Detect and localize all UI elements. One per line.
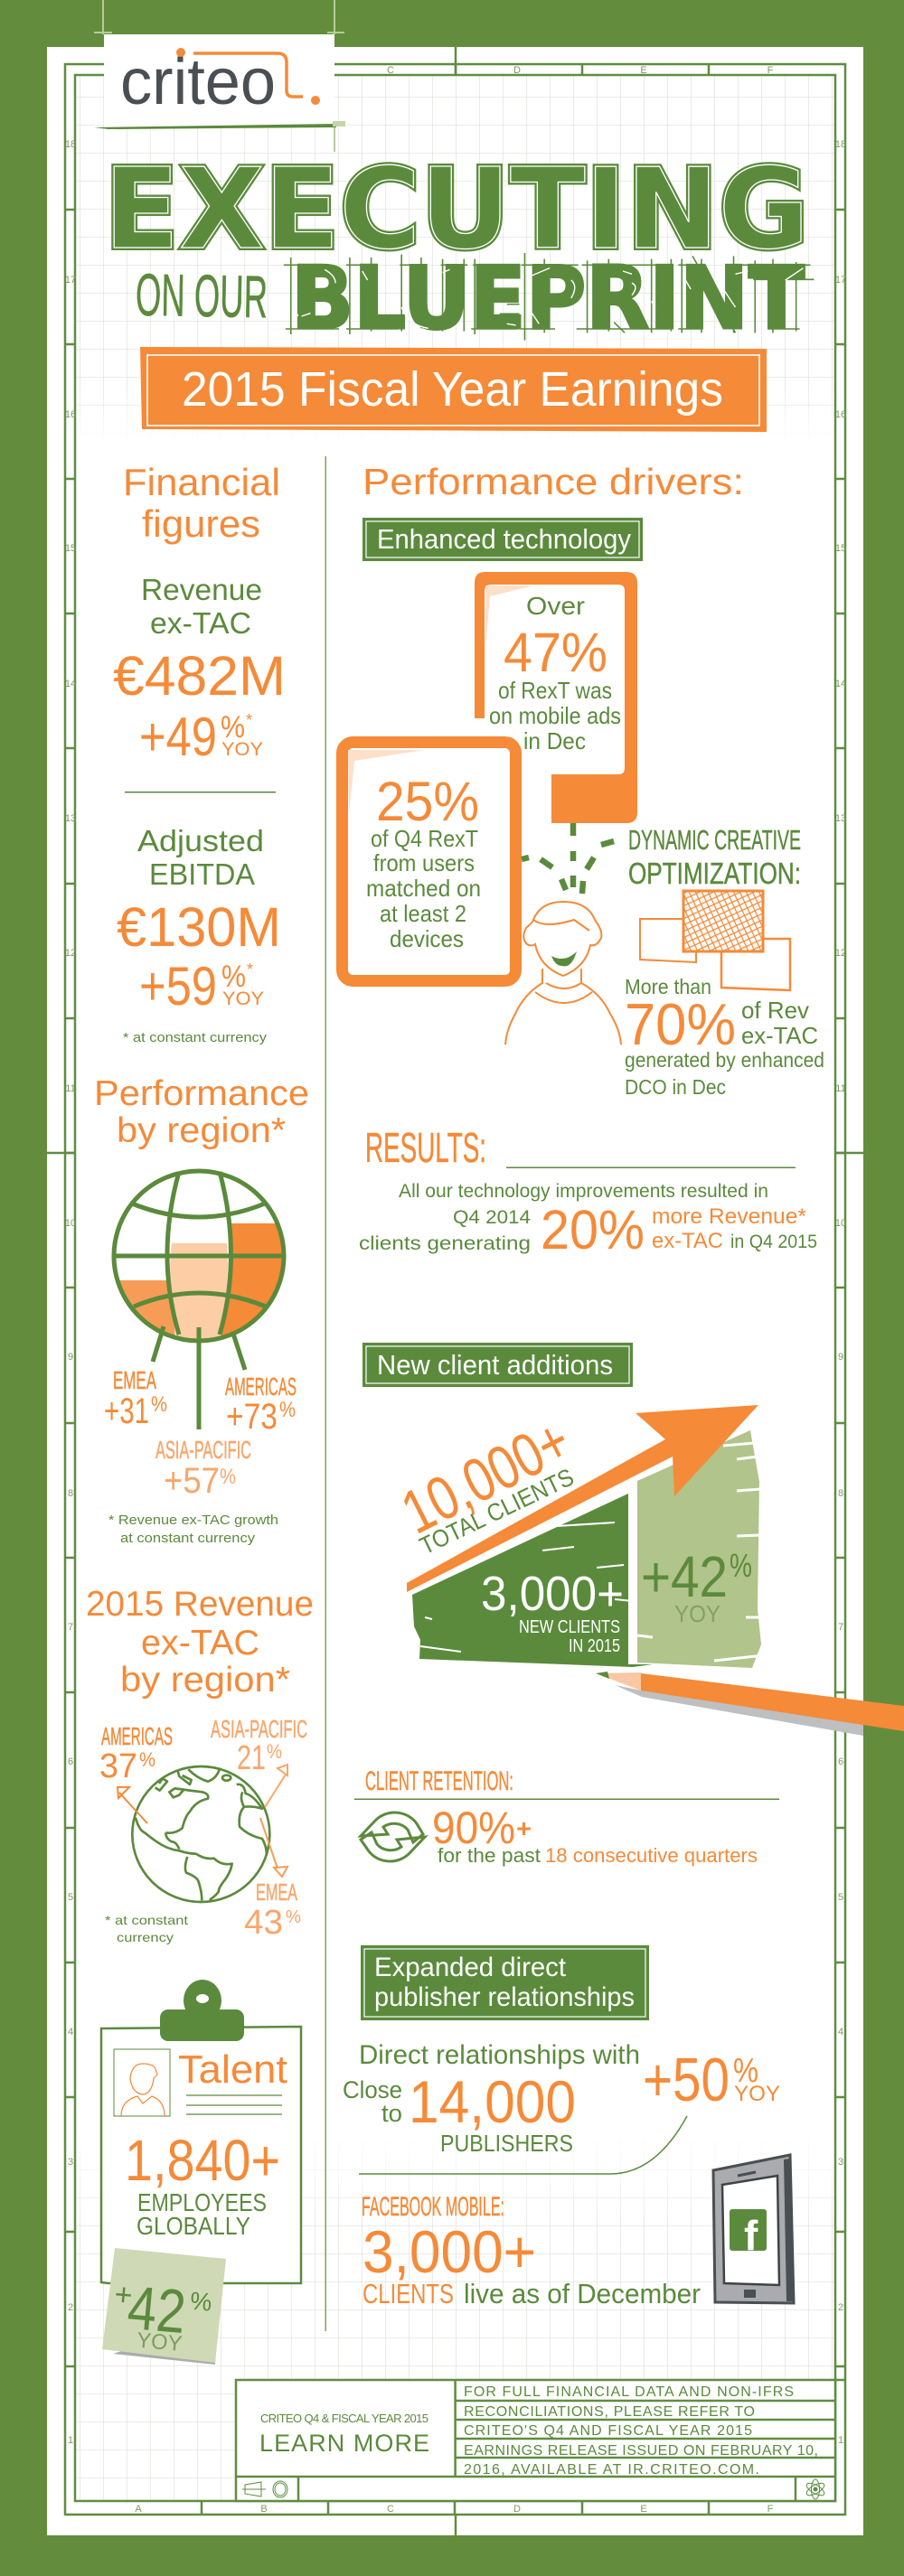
label box: enhanced technology: Enhanced technology	[377, 523, 631, 555]
label: Asia-Pacific: %	[220, 1465, 236, 1489]
footnote: * at constant currency	[123, 1030, 268, 1045]
blueprint grid	[75, 75, 835, 2501]
icon: creative rectangles	[640, 891, 790, 990]
heading: financial figures	[123, 461, 280, 545]
frame reference labels: 6	[68, 1756, 73, 1767]
label: Americas share: %	[139, 1748, 155, 1771]
title: on our: ON OUR	[135, 261, 268, 330]
frame reference labels: 4	[838, 2027, 843, 2037]
heading: 2015 Revenue	[86, 1585, 314, 1624]
callout: 47% mobile: of RexT was	[498, 677, 612, 704]
footnote: at constant currency	[120, 1531, 256, 1546]
frame reference labels: 13	[65, 813, 76, 824]
metric: adjusted EBITDA: +59	[139, 956, 217, 1016]
text: direct relationships: Direct relationships with	[359, 2040, 640, 2070]
sticky note: +42% YOY: YOY	[136, 2328, 183, 2356]
text: consecutive quarters	[438, 1844, 758, 1867]
frame reference labels: 9	[68, 1352, 73, 1363]
label: Asia-Pacific: +57	[164, 1461, 220, 1501]
text: learn more: LEARN MORE	[259, 2430, 429, 2457]
metric: employees: 1,840+	[125, 2128, 280, 2193]
metric: 70% DCO: DCO in Dec	[625, 1075, 726, 1099]
text: results statement: in Q4 2015	[730, 1232, 817, 1252]
panel: enhanced technology	[342, 518, 824, 1099]
text: disclaimer: CRITEO'S Q4 AND FISCAL YEAR 2015	[464, 2423, 752, 2439]
metric: employees: GLOBALLY	[137, 2212, 250, 2240]
frame reference labels: C	[387, 65, 394, 76]
frame reference labels: 15	[835, 543, 846, 554]
column divider	[325, 456, 326, 2331]
title: BLUEPRINT: BLUEPRINT	[291, 249, 805, 349]
icon: projection symbols	[242, 2481, 287, 2497]
footnote: currency	[117, 1930, 174, 1944]
panel: performance by region	[94, 1074, 309, 1546]
frame reference labels: 1	[68, 2435, 73, 2446]
metric: +50% YOY: %	[733, 2052, 758, 2090]
heading: facebook mobile: FACEBOOK MOBILE:	[362, 2192, 504, 2222]
metric: revenue ex-TAC: +49	[139, 707, 217, 767]
callout: 47% mobile	[475, 572, 637, 823]
subtitle banner	[140, 347, 767, 432]
icon: person portrait	[114, 2049, 170, 2116]
panel: talent clipboard	[101, 1980, 301, 2365]
metric: employees	[125, 2128, 280, 2240]
frame reference labels: 16	[835, 409, 846, 420]
heading: financial figures: figures	[142, 502, 260, 545]
chart: grid globe	[114, 1171, 289, 1429]
label: Americas: %	[279, 1398, 296, 1422]
label: Asia-Pacific share: 21	[237, 1739, 266, 1777]
metric: adjusted EBITDA: Adjusted	[137, 824, 264, 857]
frame reference labels: 6	[838, 1756, 843, 1767]
frame reference labels: 18	[835, 139, 846, 150]
metric: 3,000+ clients: live as of December	[464, 2278, 701, 2309]
frame reference labels: 3	[68, 2157, 73, 2168]
metric: 70% DCO: More than	[625, 975, 711, 998]
metric: 70% DCO: of Rev	[741, 997, 809, 1024]
callout: 25% cross-device: from users	[373, 849, 475, 876]
icon: phone with facebook	[713, 2155, 794, 2303]
label box: Expanded direct	[374, 1953, 567, 1982]
icon: atom	[805, 2479, 826, 2499]
label: Americas share: 37	[99, 1747, 137, 1785]
frame reference labels: 12	[835, 948, 846, 959]
label: Americas: +73	[226, 1397, 278, 1437]
metric: adjusted EBITDA: EBITDA	[149, 857, 255, 891]
metric: 70% DCO: generated by enhanced	[625, 1048, 824, 1072]
frame reference labels: 8	[68, 1488, 73, 1499]
frame reference labels: 13	[835, 813, 846, 824]
frame reference labels: 3	[838, 2157, 843, 2168]
frame reference labels: F	[767, 2504, 774, 2515]
label: EMEA share: 43	[244, 1904, 283, 1942]
text: disclaimer: RECONCILIATIONS, PLEASE REFER TO	[464, 2404, 755, 2420]
frame reference labels: A	[135, 2504, 142, 2515]
metric: +50% YOY: YOY	[734, 2082, 780, 2106]
frame reference labels: B	[260, 2504, 268, 2515]
label box	[361, 1945, 649, 2020]
arrow: EMEA	[260, 1818, 287, 1877]
frame reference labels: F	[767, 65, 774, 76]
heading: talent: Talent	[178, 2047, 287, 2092]
label: Asia-Pacific	[155, 1436, 251, 1501]
heading: dynamic creative optimization: DYNAMIC CREATIVE	[628, 824, 801, 856]
frame reference labels: 17	[65, 275, 76, 286]
callout: 25% cross-device: 25%	[376, 771, 479, 832]
metric: 70% DCO: 70%	[625, 991, 736, 1057]
sticky note: +42% YOY: 42	[125, 2273, 189, 2347]
icon: pencil	[596, 1672, 904, 1736]
frame reference labels: 5	[838, 1892, 843, 1903]
text: results statement	[359, 1181, 817, 1260]
text: results statement: more Revenue*	[652, 1204, 806, 1229]
sticky note: +42% YOY: %	[189, 2287, 213, 2317]
heading: performance drivers: Performance drivers:	[363, 461, 744, 502]
metric: 90%+: +	[516, 1814, 532, 1842]
frame reference labels: 4	[68, 2027, 73, 2037]
heading: dynamic creative optimization	[628, 824, 801, 890]
label: 10,000+ total clients: 10,000+	[391, 1406, 581, 1547]
label: Americas	[225, 1372, 297, 1437]
text: learn more: CRITEO Q4 & FISCAL YEAR 2015	[260, 2412, 428, 2425]
label box: publisher relationships	[374, 1982, 635, 2012]
icon: recycle arrows	[361, 1813, 425, 1861]
label: 10,000+ total clients: TOTAL CLIENTS	[416, 1463, 578, 1560]
heading: ex-TAC	[141, 1624, 259, 1663]
callout: 47% mobile: on mobile ads	[489, 702, 621, 729]
metric: adjusted EBITDA	[117, 824, 281, 1016]
logo: criteo: criteo	[120, 46, 276, 118]
text: results statement: ex-TAC	[652, 1229, 723, 1253]
label: +42% YOY: %	[730, 1547, 752, 1584]
label: Americas share	[99, 1722, 173, 1785]
label: Asia-Pacific: ASIA-PACIFIC	[155, 1436, 251, 1464]
heading	[94, 1074, 309, 1150]
text: results statement: Q4 2014	[453, 1207, 531, 1228]
metric: revenue ex-TAC: *	[246, 711, 252, 729]
metric: 14,000 publishers: PUBLISHERS	[440, 2130, 573, 2157]
sticky note: +42% YOY: +	[113, 2277, 134, 2313]
frame reference labels: 15	[65, 543, 76, 554]
chart: growth arrow	[407, 1405, 758, 1592]
title: EXECUTING: EXECUTING	[104, 145, 809, 275]
label: EMEA share: EMEA	[256, 1878, 297, 1906]
footnote: * Revenue ex-TAC growth	[108, 1513, 278, 1528]
arrow: Asia-Pacific	[265, 1765, 287, 1807]
label: +42% YOY: +42	[641, 1544, 728, 1609]
label: +42% YOY	[641, 1544, 752, 1627]
label: 3,000+ new clients: IN 2015	[569, 1636, 620, 1656]
heading: Performance	[94, 1074, 309, 1113]
callout: 47% mobile: Over	[526, 592, 585, 620]
icon: person	[505, 902, 621, 1044]
metric: revenue ex-TAC: YOY	[221, 739, 263, 760]
frame reference labels: E	[640, 2504, 647, 2515]
chart: earth globe	[132, 1766, 269, 1902]
frame reference labels: 12	[65, 948, 76, 959]
footnote	[105, 1913, 188, 1944]
metric: revenue ex-TAC: ex-TAC	[150, 606, 251, 640]
heading: results: RESULTS:	[365, 1124, 486, 1171]
metric: 14,000 publishers: to	[381, 2100, 402, 2127]
heading: by region*	[117, 1111, 286, 1150]
frame reference labels: D	[513, 65, 521, 76]
label: EMEA: %	[151, 1392, 167, 1417]
metric: adjusted EBITDA: %	[221, 960, 246, 994]
footnote: * at constant	[105, 1913, 188, 1927]
text: consecutive quarters: for the past	[438, 1844, 541, 1867]
metric: 14,000 publishers: 14,000	[409, 2068, 576, 2135]
text: results statement: 20%	[541, 1199, 645, 1260]
label: EMEA: +31	[104, 1391, 149, 1431]
text: results statement: All our technology improvements resulted in	[399, 1181, 768, 1202]
frame reference labels: 18	[65, 139, 76, 150]
subtitle banner: 2015 Fiscal Year Earnings	[182, 362, 723, 417]
frame reference labels: 1	[838, 2435, 843, 2446]
heading: dynamic creative optimization: OPTIMIZATION:	[628, 857, 801, 890]
label: 10,000+ total clients	[391, 1406, 581, 1560]
frame reference labels: 17	[835, 275, 846, 286]
frame reference labels: 14	[835, 679, 846, 689]
sticky note: +42% YOY	[102, 2248, 226, 2365]
callout: 47% mobile: 47%	[504, 622, 607, 683]
icon: clipboard clip	[160, 1980, 244, 2041]
logo: criteo	[94, 0, 345, 152]
frame reference labels: 10	[835, 1218, 846, 1229]
metric: 3,000+ clients	[363, 2218, 701, 2309]
panel: expanded direct publisher relationships	[343, 1945, 794, 2309]
frame reference labels: 2	[68, 2302, 73, 2313]
icon: thought dashes	[522, 823, 614, 894]
frame reference labels: 5	[68, 1892, 73, 1903]
footnote	[108, 1513, 278, 1546]
callout: 25% cross-device: of Q4 RexT	[371, 825, 478, 852]
label box: new client additions: New client additions	[377, 1349, 613, 1381]
text: disclaimer	[464, 2384, 818, 2478]
label: 3,000+ new clients: NEW CLIENTS	[519, 1617, 620, 1637]
frame reference labels: E	[640, 65, 647, 76]
frame reference labels: 7	[838, 1622, 843, 1633]
text: results statement: clients generating	[359, 1233, 531, 1254]
panel: revenue by region	[86, 1585, 314, 1944]
panel: client retention	[354, 1766, 779, 1867]
metric: 70% DCO	[625, 975, 824, 1099]
label box: enhanced technology	[363, 518, 643, 561]
heading: financial figures: Financial	[123, 461, 280, 503]
metric: employees: EMPLOYEES	[137, 2188, 267, 2216]
callout: 25% cross-device: devices	[390, 925, 464, 952]
text: consecutive quarters: 18 consecutive quarters	[545, 1844, 758, 1867]
frame reference labels: 8	[838, 1488, 843, 1499]
heading: CLIENT RETENTION:	[365, 1766, 513, 1796]
callout: 25% cross-device: matched on	[366, 875, 481, 902]
label: Asia-Pacific share: ASIA-PACIFIC	[211, 1715, 307, 1743]
frame reference labels: 11	[835, 1083, 846, 1094]
metric: 14,000 publishers: Close	[343, 2076, 402, 2103]
label box: new client additions	[363, 1343, 633, 1387]
frame reference labels: 2	[838, 2302, 843, 2313]
metric: revenue ex-TAC: Revenue	[141, 573, 262, 606]
metric: adjusted EBITDA: €130M	[117, 896, 281, 958]
label: Asia-Pacific share	[211, 1715, 307, 1777]
label: EMEA: EMEA	[113, 1366, 156, 1394]
frame reference labels: 14	[65, 679, 76, 689]
label: Americas: AMERICAS	[225, 1372, 297, 1400]
frame reference labels: 7	[68, 1622, 73, 1633]
heading	[86, 1585, 314, 1700]
chart: light green bar	[637, 1430, 764, 1668]
metric: adjusted EBITDA: YOY	[222, 988, 264, 1009]
metric: revenue ex-TAC	[113, 573, 286, 767]
panel: new client additions	[363, 1343, 904, 1736]
panel: results	[359, 1124, 817, 1260]
metric: 14,000 publishers	[343, 2068, 576, 2157]
metric: 90%+: 90%	[432, 1803, 515, 1853]
text: disclaimer: FOR FULL FINANCIAL DATA AND NON-IFRS	[464, 2384, 794, 2400]
text: disclaimer: EARNINGS RELEASE ISSUED ON FEBRUARY 10,	[464, 2443, 818, 2459]
frame reference labels: D	[513, 2504, 521, 2515]
metric: 70% DCO: ex-TAC	[741, 1022, 818, 1049]
label: +42% YOY: YOY	[674, 1600, 720, 1627]
metric: 3,000+ clients: 3,000+	[363, 2218, 536, 2285]
metric: adjusted EBITDA: *	[247, 960, 253, 979]
label: EMEA share: %	[286, 1907, 301, 1927]
metric: +50% YOY: +50	[643, 2046, 730, 2114]
title: EXECUTING: EXECUTING	[104, 145, 809, 275]
frame reference labels: C	[387, 2504, 394, 2515]
frame reference labels: 9	[838, 1352, 843, 1363]
panel: financial figures	[113, 461, 286, 1045]
icon: phone with facebook: f	[744, 2212, 758, 2259]
label: Americas share: AMERICAS	[101, 1722, 173, 1750]
label: Asia-Pacific share: %	[267, 1740, 282, 1763]
label: EMEA share	[244, 1878, 301, 1942]
label: 3,000+ new clients	[481, 1567, 624, 1656]
arrow: Americas	[118, 1787, 147, 1823]
metric: revenue ex-TAC: %	[221, 710, 245, 745]
callout: 25% cross-device: at least 2	[380, 900, 466, 927]
metric: revenue ex-TAC: €482M	[113, 645, 286, 707]
frame reference labels: 10	[65, 1218, 76, 1229]
callout: 25% cross-device	[342, 743, 515, 981]
heading: by region*	[120, 1661, 290, 1700]
label: EMEA	[104, 1366, 167, 1431]
callout: 47% mobile: in Dec	[523, 727, 586, 754]
frame reference labels: 16	[65, 409, 76, 420]
label: 3,000+ new clients: 3,000+	[481, 1567, 624, 1621]
chart: dark green bar	[412, 1494, 653, 1667]
frame reference labels: 11	[65, 1083, 76, 1094]
metric: 3,000+ clients: CLIENTS	[363, 2278, 454, 2309]
title block: learn more	[236, 2380, 845, 2501]
text: disclaimer: 2016, AVAILABLE AT IR.CRITEO.COM.	[464, 2462, 759, 2478]
text: learn more	[259, 2412, 429, 2457]
